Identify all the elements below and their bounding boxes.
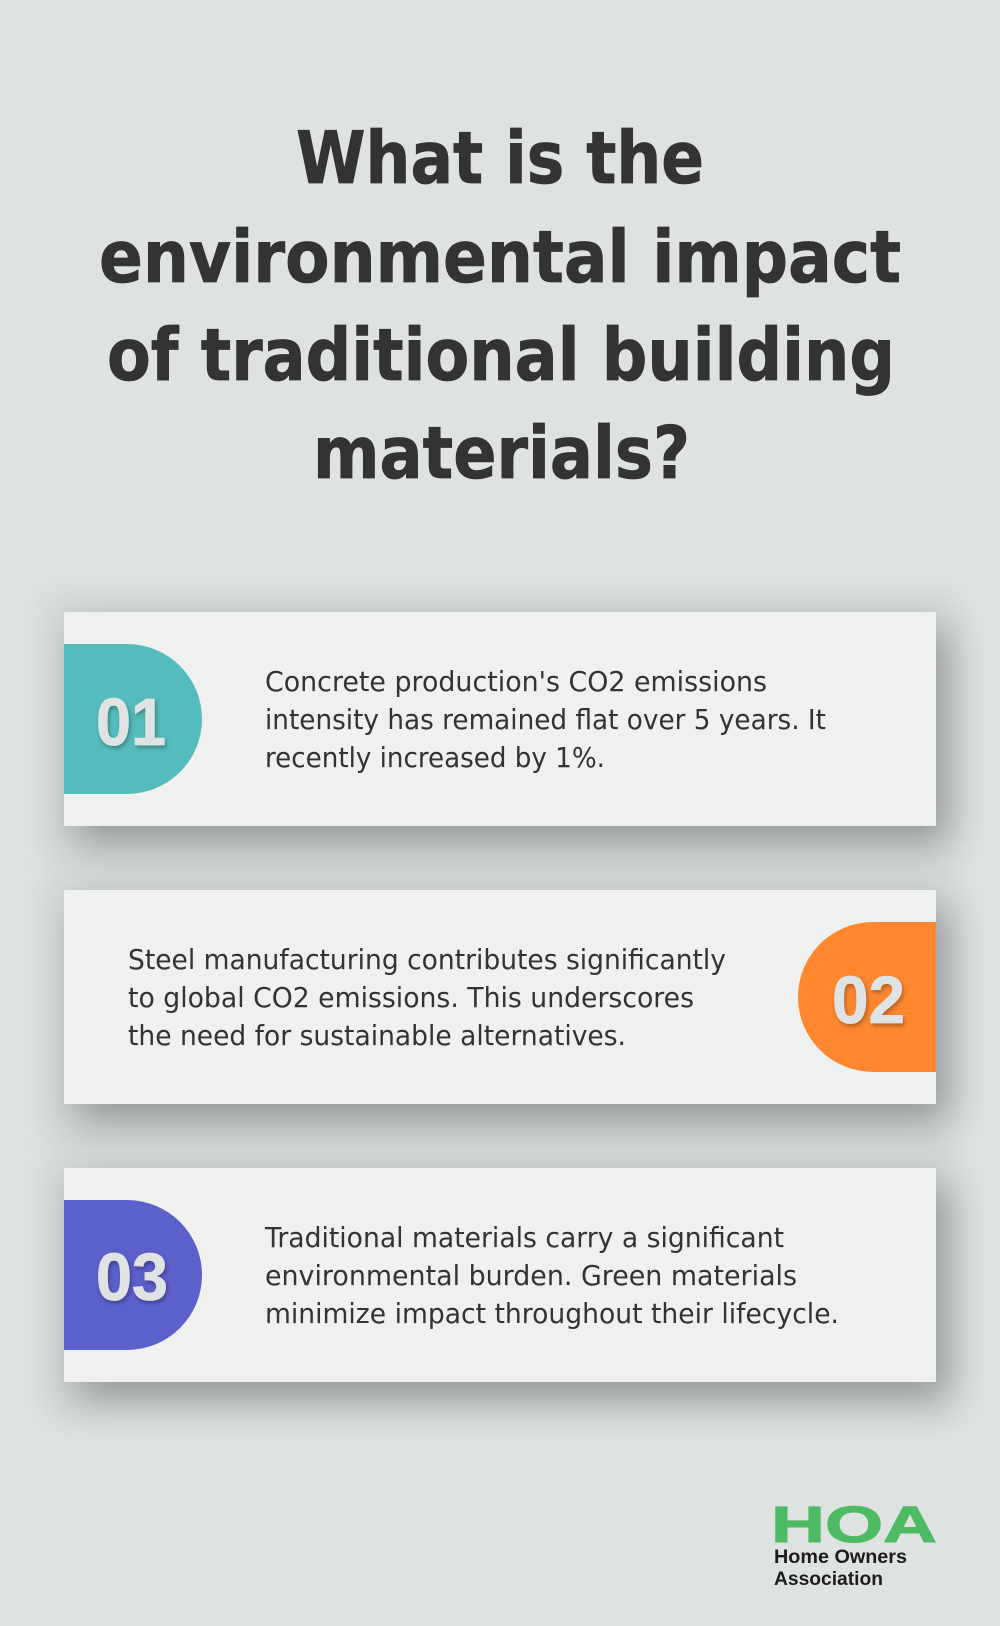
text block: steel: to global CO2 emissions. This underscores <box>128 982 694 1014</box>
text block: traditional materials: environmental burden. Green materials <box>265 1260 797 1292</box>
badge: 02 <box>798 922 936 1072</box>
text block: traditional materials: minimize impact throughout their lifecycle. <box>265 1298 839 1330</box>
text block: traditional materials: Traditional materials carry a significant <box>264 1222 784 1254</box>
badge: 01: 01 <box>96 685 166 760</box>
title: environmental impact <box>99 215 901 299</box>
text block: concrete: Concrete production's CO2 emissions <box>265 666 767 698</box>
title: of traditional building <box>107 313 895 397</box>
title: materials? <box>313 411 690 495</box>
text block: steel: Steel manufacturing contributes significantly <box>128 944 726 976</box>
text block: steel: the need for sustainable alternatives. <box>128 1020 626 1052</box>
panel: card 03 traditional materials <box>44 1148 956 1418</box>
text block: traditional materials <box>264 1222 839 1330</box>
panel: card 02 steel <box>44 870 956 1140</box>
logo: HOA Home Owners Association: Home Owners <box>774 1547 907 1568</box>
text block: concrete: recently increased by 1%. <box>265 742 605 774</box>
text block: concrete: intensity has remained flat over 5 years. It <box>265 704 826 736</box>
badge: 03: 03 <box>96 1240 168 1315</box>
logo: HOA Home Owners Association: HOA <box>771 1496 937 1553</box>
panel: card 01 concrete <box>44 592 956 862</box>
title: What is the <box>296 116 704 200</box>
badge: 01 <box>64 644 202 794</box>
title <box>99 116 901 495</box>
text block: steel <box>128 944 726 1052</box>
badge: 03 <box>64 1200 202 1350</box>
text block: concrete <box>265 666 826 774</box>
badge: 02: 02 <box>832 963 905 1038</box>
logo: HOA Home Owners Association <box>771 1496 937 1590</box>
logo: HOA Home Owners Association: Association <box>774 1569 883 1590</box>
